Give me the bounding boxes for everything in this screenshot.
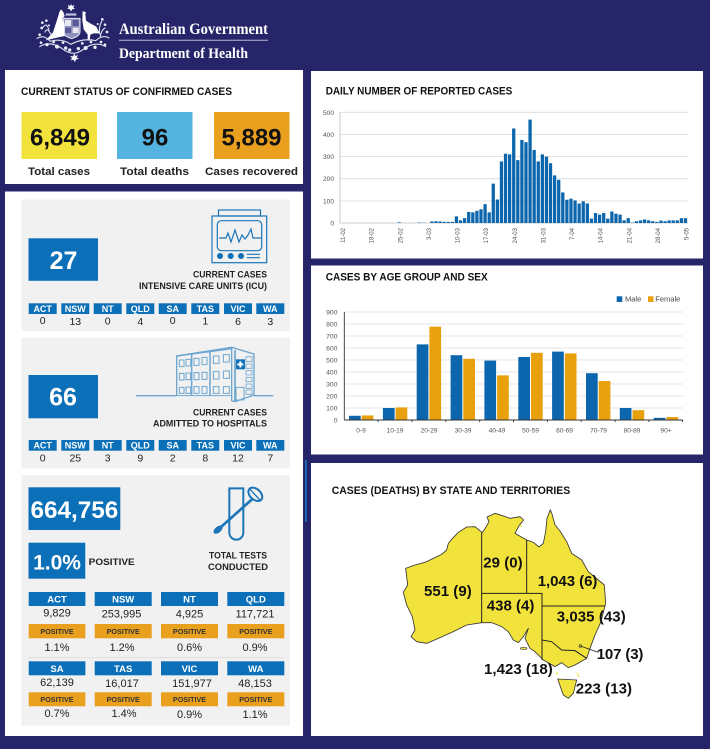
map labels: cases and deaths: 1,423 (18) (484, 661, 553, 678)
chart: daily cases bars: 7-04 (570, 227, 576, 240)
state breakdown: ICU: 0 (105, 316, 111, 328)
stat: total deaths: 96 (142, 124, 168, 152)
stat: total cases (22, 112, 97, 178)
panel: hospital admissions (22, 338, 290, 468)
icon: hospital building (136, 347, 273, 402)
caption: hospitals: CURRENT CASES (193, 408, 267, 418)
state tests row: ACT NSW NT QLD: ACT (47, 594, 67, 606)
state breakdown: ICU: 4 (137, 316, 143, 328)
state tests row: ACT NSW NT QLD: QLD (246, 594, 266, 606)
map labels: cases and deaths: 3,035 (43) (557, 609, 626, 626)
stat: total deaths (117, 112, 192, 178)
panel: cases by age group and sex (311, 266, 703, 454)
stat: total deaths: Total deaths (120, 166, 189, 178)
state tests row: SA TAS VIC WA: VIC (182, 664, 198, 675)
stat: ICU total: 27 (50, 247, 77, 275)
state breakdown: ICU: NSW (65, 304, 86, 314)
chart: daily cases bars: 24-03 (513, 227, 519, 243)
state breakdown: ICU: NT (102, 304, 114, 314)
state tests row: ACT NSW NT QLD: 1.2% (109, 642, 135, 654)
state tests row: ACT NSW NT QLD: 0.9% (242, 642, 268, 654)
chart: age and sex bars: 60-69 (556, 428, 573, 434)
state tests row: SA TAS VIC WA: POSITIVE (40, 695, 74, 704)
heading: states and territories: CASES (DEATHS) BY STATE AND TERRITORIES (332, 485, 570, 497)
state tests row: SA TAS VIC WA: 48,153 (238, 678, 272, 690)
stat: total cases: Total cases (28, 166, 90, 178)
panel: daily number of reported cases (311, 71, 703, 258)
state breakdown: ICU: TAS (197, 304, 214, 314)
map labels: cases and deaths: 1,043 (6) (538, 573, 597, 590)
department name: Department of Health: Department of Health (119, 46, 249, 62)
state breakdown: ICU: WA (263, 304, 278, 314)
state tests row: SA TAS VIC WA: 0.7% (44, 708, 70, 720)
state tests row: ACT NSW NT QLD: 117,721 (236, 608, 274, 620)
map labels: cases and deaths: 29 (0) (483, 554, 523, 571)
icon: heart monitor (212, 210, 267, 263)
chart: age and sex bars: 30-39 (455, 428, 472, 434)
stat: cases recovered: 5,889 (221, 124, 282, 152)
chart: daily cases bars: 11-02 (341, 227, 347, 243)
state breakdown: ICU: 6 (235, 316, 241, 328)
caption: hospitals: ADMITTED TO HOSPITALS (153, 418, 267, 430)
state breakdown: hospitals: 9 (137, 453, 143, 465)
chart: age and sex bars: 10-19 (387, 428, 404, 434)
heading: current status: CURRENT STATUS OF CONFIRMED CASES (21, 86, 232, 98)
state breakdown: hospitals: 0 (40, 453, 46, 465)
state breakdown: ICU: 1 (202, 316, 208, 328)
stat: percent positive: 1.0% (33, 552, 81, 574)
chart: daily cases bars: 17-03 (484, 227, 490, 243)
state breakdown: hospitals: 3 (105, 453, 111, 465)
chart: daily cases bars: 200 (323, 176, 334, 183)
icon: test tube and swab (212, 485, 265, 540)
state breakdown: hospitals: NSW (65, 441, 86, 451)
caption: total tests: TOTAL TESTS (209, 551, 267, 562)
state tests row: SA TAS VIC WA: WA (248, 664, 264, 675)
state breakdown: hospitals: 8 (202, 453, 208, 465)
state breakdown: ICU: 0 (170, 315, 176, 327)
chart: daily cases bars: 5-05 (684, 227, 690, 240)
map: Australia (403, 510, 606, 698)
state tests row: ACT NSW NT QLD: 0.6% (177, 642, 202, 654)
caption: ICU (139, 270, 267, 292)
state tests row: ACT NSW NT QLD (29, 592, 284, 654)
chart: daily cases bars (323, 110, 690, 243)
chart: age and sex bars: 700 (326, 334, 338, 340)
state tests row: ACT NSW NT QLD: 1.1% (44, 642, 70, 654)
legend: male and female: Male (625, 295, 641, 304)
state breakdown: ICU: 13 (69, 316, 81, 328)
state breakdown: hospitals: 12 (232, 453, 244, 465)
panel: current status of confirmed cases (5, 70, 303, 184)
header: logo and department name (37, 4, 269, 62)
chart: daily cases bars: 500 (323, 110, 334, 117)
panel: hospital and testing column (5, 192, 303, 736)
chart: daily cases bars: 28-04 (656, 227, 662, 243)
state breakdown: hospitals: ACT (33, 441, 52, 451)
chart: age and sex bars: 50-59 (522, 428, 539, 434)
state tests row: ACT NSW NT QLD: NSW (112, 594, 134, 606)
chart: age and sex bars (326, 310, 683, 434)
chart: age and sex bars: 0 (334, 418, 338, 424)
state tests row: SA TAS VIC WA: TAS (114, 664, 132, 675)
state tests row: ACT NSW NT QLD: POSITIVE (107, 627, 140, 636)
chart: age and sex bars: 800 (326, 322, 338, 328)
state breakdown: hospitals: TAS (197, 441, 214, 451)
state tests row: ACT NSW NT QLD: 9,829 (43, 608, 71, 620)
state breakdown: ICU: SA (166, 304, 179, 314)
chart: age and sex bars: 90+ (660, 428, 672, 434)
chart: daily cases bars: 14-04 (599, 227, 605, 243)
chart: daily cases bars: 400 (323, 132, 334, 139)
chart: age and sex bars: 600 (326, 346, 338, 352)
map labels: cases and deaths (424, 554, 643, 697)
state tests row: SA TAS VIC WA: POSITIVE (107, 695, 140, 704)
state breakdown: ICU: ACT (33, 304, 52, 314)
chart: age and sex bars: 400 (326, 370, 338, 376)
chart: age and sex bars: 20-29 (421, 428, 438, 434)
state breakdown: ICU: 0 (40, 315, 46, 327)
state breakdown: hospitals: WA (263, 441, 278, 451)
chart: age and sex bars: 0-9 (356, 428, 366, 434)
stat: hospital total: 66 (49, 384, 77, 412)
heading: age and sex: CASES BY AGE GROUP AND SEX (326, 271, 488, 283)
heading: daily cases: DAILY NUMBER OF REPORTED CASES (326, 86, 512, 98)
caption: ICU: INTENSIVE CARE UNITS (ICU) (139, 281, 267, 292)
state tests row: SA TAS VIC WA: 16,017 (105, 678, 139, 690)
state tests row: SA TAS VIC WA: 62,139 (40, 677, 74, 689)
icon: coat of arms (37, 4, 109, 62)
stat: percent positive: POSITIVE (89, 557, 135, 568)
panel: ICU cases (22, 200, 290, 331)
stat: total tests: 664,756 (30, 497, 118, 524)
chart: age and sex bars: 900 (326, 310, 338, 316)
panel: total tests (22, 475, 290, 726)
state breakdown: ICU: VIC (230, 304, 246, 314)
map labels: cases and deaths: 438 (4) (487, 598, 534, 615)
state tests row: ACT NSW NT QLD: POSITIVE (40, 627, 74, 636)
stat: percent positive (28, 543, 135, 579)
map labels: cases and deaths: 223 (13) (576, 680, 632, 697)
chart: age and sex bars: 40-49 (489, 428, 506, 434)
caption: hospitals (153, 408, 267, 430)
state breakdown: hospitals: SA (166, 441, 179, 451)
chart: daily cases bars: 21-04 (627, 227, 633, 243)
chart: age and sex bars: 70-79 (590, 428, 607, 434)
state tests row: ACT NSW NT QLD: 4,925 (176, 608, 203, 620)
chart: daily cases bars: 25-02 (398, 227, 404, 243)
state breakdown: hospitals: VIC (230, 441, 246, 451)
chart: daily cases bars: 100 (323, 198, 334, 205)
state tests row: SA TAS VIC WA: 151,977 (172, 678, 212, 690)
map labels: cases and deaths: 551 (9) (424, 583, 472, 600)
chart: age and sex bars: 300 (326, 382, 338, 388)
stat: ICU total (28, 238, 98, 281)
stat: cases recovered: Cases recovered (205, 166, 298, 178)
chart: age and sex bars: 500 (326, 358, 338, 364)
caption: total tests: CONDUCTED (208, 562, 268, 573)
chart: age and sex bars: 200 (326, 394, 338, 400)
chart: daily cases bars: 0 (330, 220, 334, 228)
state tests row: SA TAS VIC WA: POSITIVE (173, 695, 206, 704)
state breakdown: hospitals: NT (102, 441, 114, 451)
state breakdown: hospitals (29, 440, 284, 465)
state tests row: SA TAS VIC WA: 1.4% (111, 708, 137, 720)
state breakdown: ICU (29, 303, 284, 328)
chart: daily cases bars: 10-03 (456, 227, 462, 243)
state breakdown: hospitals: 7 (267, 453, 273, 465)
chart: daily cases bars: 31-03 (541, 227, 547, 243)
stat: total tests (28, 487, 120, 530)
stat: total cases: 6,849 (30, 124, 90, 152)
panel: cases and deaths by state (311, 463, 703, 736)
state tests row: SA TAS VIC WA: SA (50, 664, 64, 675)
state breakdown: hospitals: QLD (131, 441, 150, 451)
state breakdown: ICU: 3 (267, 316, 273, 328)
stat: cases recovered (205, 112, 298, 178)
department name: Australian Government: Australian Government (119, 21, 269, 38)
legend: male and female (617, 295, 680, 304)
state breakdown: hospitals: 25 (69, 453, 81, 465)
state tests row: SA TAS VIC WA (29, 661, 284, 721)
state tests row: ACT NSW NT QLD: 253,995 (102, 608, 141, 620)
stat: hospital total (28, 375, 98, 418)
chart: daily cases bars: 18-02 (370, 227, 376, 243)
chart: age and sex bars: 100 (326, 406, 338, 412)
state tests row: SA TAS VIC WA: POSITIVE (239, 695, 273, 704)
state breakdown: ICU: QLD (131, 304, 150, 314)
chart: daily cases bars: 3-03 (427, 227, 433, 240)
state tests row: ACT NSW NT QLD: POSITIVE (173, 627, 206, 636)
state tests row: ACT NSW NT QLD: POSITIVE (239, 627, 273, 636)
legend: male and female: Female (655, 295, 680, 304)
map labels: cases and deaths: 107 (3) (597, 646, 643, 663)
chart: age and sex bars: 80-89 (624, 428, 641, 434)
state tests row: ACT NSW NT QLD: NT (183, 594, 196, 606)
caption: total tests (208, 551, 268, 573)
state breakdown: hospitals: 2 (170, 453, 176, 465)
state tests row: SA TAS VIC WA: 0.9% (177, 709, 202, 721)
chart: daily cases bars: 300 (323, 154, 334, 161)
state tests row: SA TAS VIC WA: 1.1% (242, 709, 268, 721)
caption: ICU: CURRENT CASES (193, 270, 267, 280)
